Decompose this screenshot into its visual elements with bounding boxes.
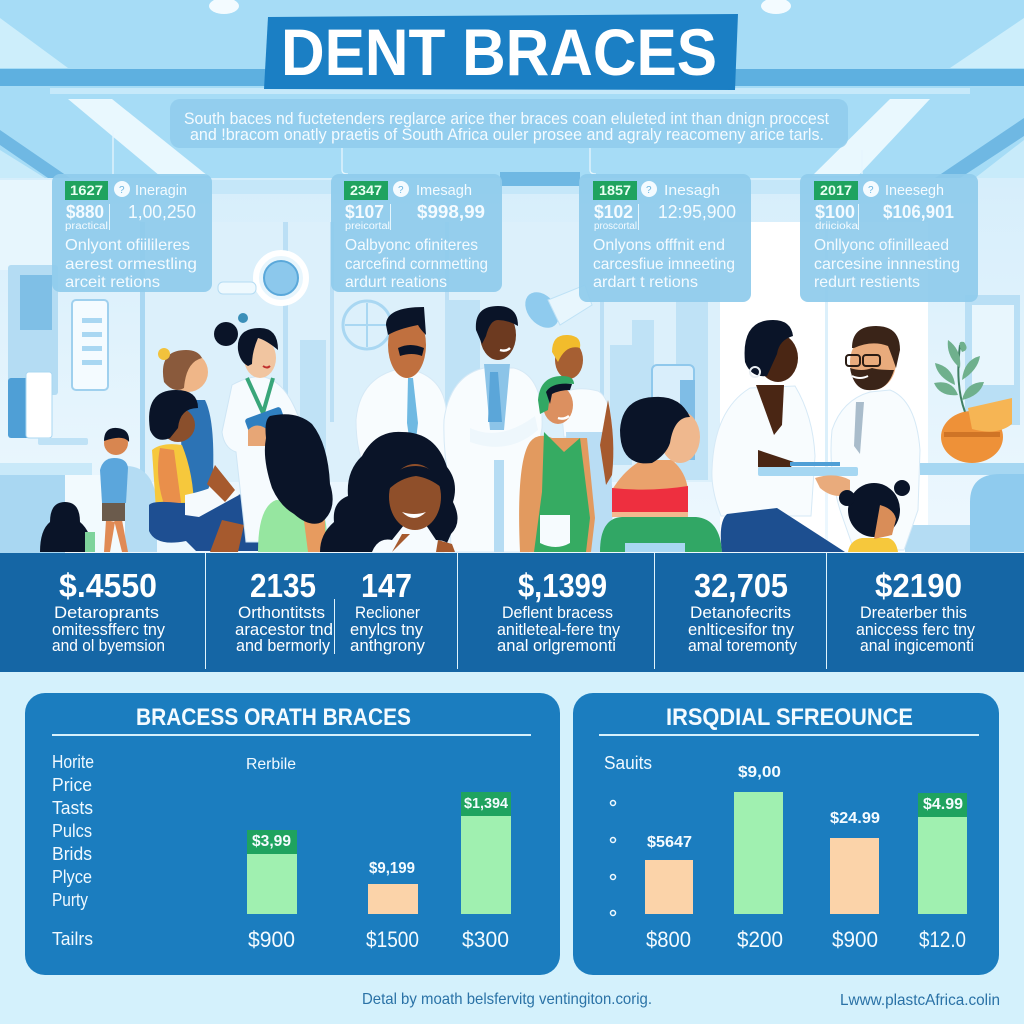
panel: frequency chart: IRSQDIAL SFREOUNCE	[666, 704, 913, 731]
bar chart: $200	[737, 927, 783, 952]
clinic ceiling	[0, 0, 1024, 180]
card 3: 12:95,900	[658, 202, 736, 222]
card 1: aerest ormestling	[65, 256, 197, 273]
stat 6: Dreaterber this	[860, 603, 967, 622]
category labels: Horite	[52, 752, 94, 772]
card 3: $102	[594, 202, 633, 222]
panel: braces price chart	[25, 693, 560, 975]
person: small boy	[100, 428, 129, 552]
category labels: Purty	[52, 890, 88, 910]
person: woman with voluminous black hair, facing viewer	[320, 432, 458, 552]
person: youth in green dress	[519, 376, 595, 552]
intro text block	[170, 99, 848, 148]
stat 5: enlticesifor tny	[688, 620, 794, 639]
person: bearded doctor with glasses	[831, 326, 920, 550]
category labels: Tailrs	[52, 929, 93, 949]
dental lamps	[218, 253, 592, 349]
left monitor and shelves	[0, 265, 157, 553]
title banner: DENT BRACES	[281, 15, 717, 89]
panel: frequency chart	[573, 693, 999, 975]
card 1	[52, 174, 212, 292]
card 3: Inesagh	[664, 182, 720, 199]
stat 4: anal orlgremonti	[497, 636, 616, 655]
category labels: Rerbile	[246, 756, 296, 773]
bar chart: $800	[646, 927, 691, 952]
clinic back wall and windows	[0, 172, 1024, 553]
category labels	[52, 752, 296, 949]
card 4: driicioka	[815, 221, 859, 232]
bar chart: $900	[248, 927, 295, 952]
axis dots	[610, 800, 616, 916]
bar chart: $9,00	[738, 764, 781, 781]
card 2	[331, 174, 502, 292]
bar chart: $1500	[366, 927, 419, 952]
stat 6: aniccess ferc tny	[856, 620, 975, 639]
card 4	[800, 174, 978, 302]
card 2: ardurt reations	[345, 274, 447, 291]
plant in orange pot	[934, 340, 1012, 463]
card 4: redurt restients	[814, 274, 920, 291]
person: doctor with mustache	[356, 307, 446, 552]
person: seated woman with curly hair and red top	[600, 397, 722, 552]
card 1: Ineragin	[135, 182, 187, 199]
card 1: ?	[119, 185, 125, 196]
stat 3: 147	[361, 567, 412, 604]
category labels: Pulcs	[52, 821, 92, 841]
card 2: $998,99	[417, 202, 485, 222]
person: child seated bottom left	[40, 502, 95, 552]
person: little girl with two buns	[839, 480, 910, 552]
person: seated woman in yellow top	[149, 390, 262, 552]
card 3: carcesfiue imneeting	[593, 256, 735, 273]
stat 1	[52, 567, 165, 655]
bar chart: $300	[462, 927, 509, 952]
card 2: 2347	[350, 182, 382, 198]
card 3: 1857	[599, 182, 631, 198]
bar chart: $24.99	[830, 810, 880, 827]
stat 6: anal ingicemonti	[860, 636, 974, 655]
stat 1: and ol byemsion	[52, 636, 165, 655]
intro text block: South baces nd fuctetenders reglarce arice ther braces coan eluleted int than dnign proccest	[184, 109, 829, 128]
stat 4: $,1399	[518, 567, 607, 604]
category labels: Plyce	[52, 867, 92, 887]
stat 5: 32,705	[694, 567, 788, 604]
stat 6	[856, 567, 975, 655]
stat 2: 2135	[250, 567, 316, 604]
bar chart: $1,394	[464, 795, 509, 812]
stat 2: and bermorly	[236, 636, 330, 655]
card 2: carcefind cornmetting	[345, 256, 488, 273]
footer source note: Detal by moath belsfervitg ventingiton.corig.	[362, 991, 652, 1008]
person: nurse with bun	[214, 313, 306, 542]
person: woman with yellow headwrap	[552, 335, 613, 552]
bar chart	[645, 764, 967, 952]
person: standing woman in blue	[158, 348, 213, 505]
card 2: ?	[398, 185, 404, 196]
bar chart: $4.99	[923, 796, 963, 813]
panel: braces price chart: BRACESS ORATH BRACES	[136, 704, 411, 731]
card 4: $100	[815, 202, 855, 222]
card 4: 2017	[820, 182, 852, 198]
stat 2	[235, 567, 333, 655]
consultation desk	[758, 462, 858, 496]
card 4: ?	[868, 185, 874, 196]
card 2: $107	[345, 202, 384, 222]
intro text block: and !bracom onatly praetis of South Africa ouler prosee and agraly reacomeny arice tarls.	[190, 125, 824, 144]
bar chart: $9,199	[369, 860, 415, 877]
stat 3: anthgrony	[350, 636, 425, 655]
stat 2: aracestor tnd	[235, 620, 333, 639]
stat 5	[688, 567, 797, 655]
card 1: Onlyont ofiilileres	[65, 237, 190, 254]
card 2: Oalbyonc ofiniteres	[345, 237, 478, 254]
bar chart: $3,99	[252, 833, 291, 850]
card 1: $880	[66, 202, 104, 222]
connector lines	[113, 130, 862, 174]
bar chart: $12.0	[919, 927, 966, 952]
stat 1: $.4550	[59, 567, 157, 604]
stat 3	[350, 567, 425, 655]
category labels: Brids	[52, 844, 92, 864]
person: tall doctor with arms crossed	[444, 306, 542, 552]
stat 3: enylcs tny	[350, 620, 423, 639]
stat 4	[497, 567, 620, 655]
card 3	[579, 174, 751, 302]
person: woman in white coat, dark skin	[712, 320, 845, 552]
category labels: Price	[52, 775, 92, 795]
bar chart: $5647	[647, 834, 692, 851]
stat 1: omitessfferc tny	[52, 620, 165, 639]
card 4: Onllyonc ofinilleaed	[814, 237, 949, 254]
panel: frequency chart: Sauits	[604, 753, 652, 773]
card 1: 1,00,250	[128, 202, 196, 222]
person: woman with long black hair from behind	[258, 414, 333, 552]
bar chart	[247, 792, 511, 952]
card 4: $106,901	[883, 202, 954, 222]
card 4: carcesine innnesting	[814, 256, 960, 273]
city silhouette	[300, 300, 708, 480]
stat 4: Deflent bracess	[502, 603, 613, 622]
stat 5: amal toremonty	[688, 636, 797, 655]
stat 2: Orthontitsts	[238, 603, 325, 622]
card 3: Onlyons offfnit end	[593, 237, 725, 254]
card 3: ?	[646, 185, 652, 196]
card 3: proscortal	[594, 221, 637, 232]
statistics band	[0, 553, 1024, 672]
card 1: 1627	[70, 182, 103, 198]
stat 1: Detaroprants	[54, 603, 159, 622]
card 2: preicortal	[345, 221, 390, 232]
category labels: Tasts	[52, 798, 93, 818]
card 4: Ineesegh	[885, 182, 944, 199]
card 2: Imesagh	[416, 182, 472, 199]
bar chart: $900	[832, 927, 878, 952]
right cabinet, screen and chair	[652, 295, 1024, 552]
card 1: arceit retions	[65, 274, 160, 291]
stat 4: anitleteal-fere tny	[497, 620, 620, 639]
stat 3: Reclioner	[355, 603, 420, 622]
stat 6: $2190	[875, 567, 962, 604]
footer website: Lwww.plastcAfrica.colin	[840, 992, 1000, 1009]
card 1: practical	[65, 221, 108, 232]
card 3: ardart t retions	[593, 274, 698, 291]
stat 5: Detanofecrits	[690, 603, 791, 622]
